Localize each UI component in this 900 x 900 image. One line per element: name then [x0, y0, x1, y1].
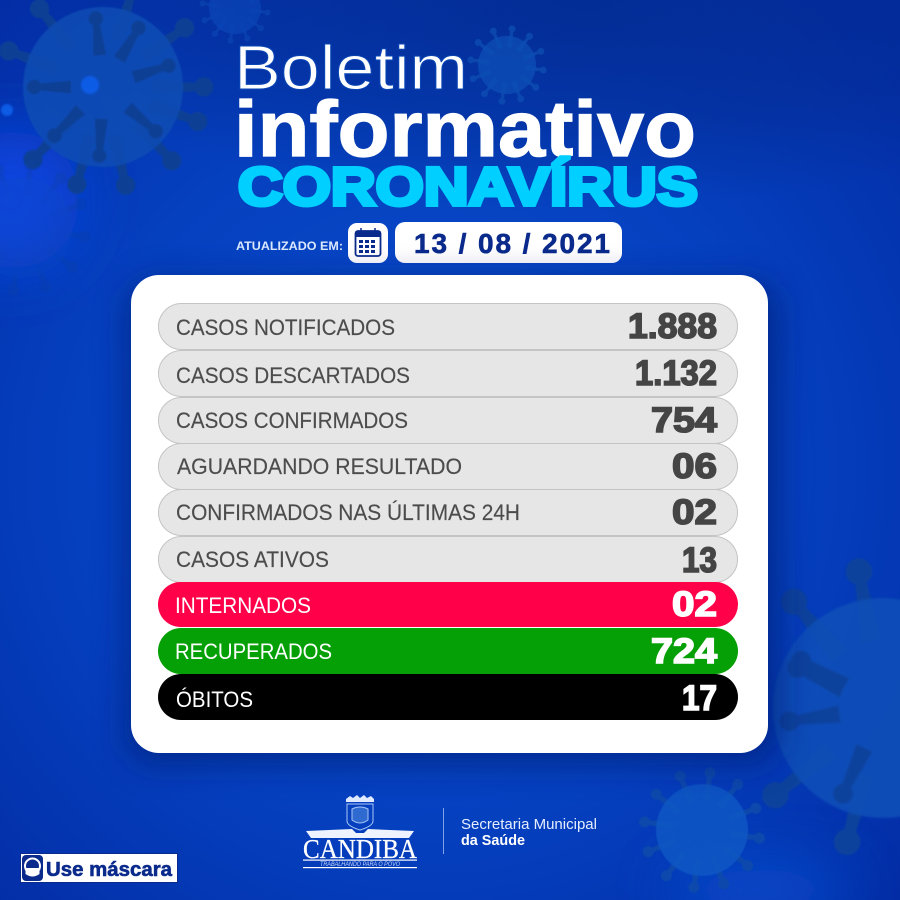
text block: secretaria: Secretaria Municipal — [461, 817, 597, 833]
row: recuperados — [158, 628, 738, 674]
logo: Candiba — [303, 795, 417, 868]
row: confirmados nas ultimas 24h: 02 — [672, 493, 717, 532]
row: casos confirmados — [158, 398, 738, 444]
row: casos ativos: CASOS ATIVOS — [176, 547, 329, 572]
row: internados: 02 — [672, 585, 717, 624]
row: recuperados: RECUPERADOS — [175, 639, 332, 664]
row: internados — [158, 582, 738, 627]
text block: secretaria — [461, 817, 597, 849]
row: casos descartados — [158, 350, 738, 396]
row: internados: INTERNADOS — [175, 593, 311, 618]
icon: virus core highlight — [81, 76, 99, 94]
row: casos descartados: 1.132 — [635, 354, 717, 393]
row: casos descartados: CASOS DESCARTADOS — [176, 363, 410, 388]
logo lower rule — [303, 867, 417, 868]
background glow left — [0, 130, 80, 270]
row: casos confirmados: 754 — [651, 401, 718, 440]
panel shadow — [125, 280, 780, 765]
icon: large virus top left — [0, 0, 213, 197]
icon: masked face — [22, 855, 43, 881]
row: obitos — [158, 674, 738, 720]
row: aguardando resultado: AGUARDANDO RESULTADO — [177, 454, 462, 479]
row: aguardando resultado: 06 — [672, 447, 717, 486]
row: obitos: 17 — [682, 679, 717, 718]
row: aguardando resultado — [158, 444, 738, 490]
background glow bottom — [670, 865, 850, 900]
date pill — [395, 222, 622, 263]
updated date row — [236, 222, 622, 263]
background top shade — [20, 0, 900, 210]
logo slogan: TRABALHANDO PARA O POVO — [320, 862, 400, 868]
icon: faint virus left — [0, 159, 91, 297]
icon: large virus bottom right — [757, 556, 900, 858]
title line: informativo: informativo — [234, 84, 696, 173]
title — [234, 34, 698, 217]
row: confirmados nas ultimas 24h: CONFIRMADOS NAS ÚLTIMAS 24H — [176, 500, 520, 525]
row: recuperados: 724 — [651, 632, 718, 671]
row: casos ativos — [158, 536, 738, 582]
title line: Boletim: Boletim — [234, 34, 468, 103]
panel: case statistics — [131, 275, 768, 753]
row: casos notificados: 1.888 — [628, 307, 717, 346]
date pill: 13 / 08 / 2021 — [414, 228, 610, 259]
crest banner — [306, 829, 414, 838]
badge: use mask: Use máscara — [46, 858, 173, 881]
icon: virus behind title — [467, 25, 547, 105]
icon: small virus bottom — [638, 766, 766, 894]
icon: crest — [346, 795, 374, 830]
title line: CORONAVÍRUS: CORONAVÍRUS — [238, 157, 698, 217]
row: obitos: ÓBITOS — [176, 687, 253, 712]
icon: faint virus top — [199, 0, 271, 44]
text block: secretaria: da Saúde — [461, 833, 525, 849]
logo: Candiba: CANDIBA — [303, 834, 417, 864]
logo rules — [303, 860, 417, 861]
row: casos confirmados: CASOS CONFIRMADOS — [176, 408, 408, 433]
label: updated at: ATUALIZADO EM: — [236, 241, 343, 253]
icon: virus side highlight — [1, 104, 13, 116]
row: confirmados nas ultimas 24h — [158, 490, 738, 536]
row: casos ativos: 13 — [682, 541, 717, 580]
row: casos notificados: CASOS NOTIFICADOS — [176, 315, 395, 340]
badge: use mask — [20, 854, 178, 882]
row: casos notificados — [158, 304, 738, 350]
icon: calendar — [348, 223, 388, 263]
